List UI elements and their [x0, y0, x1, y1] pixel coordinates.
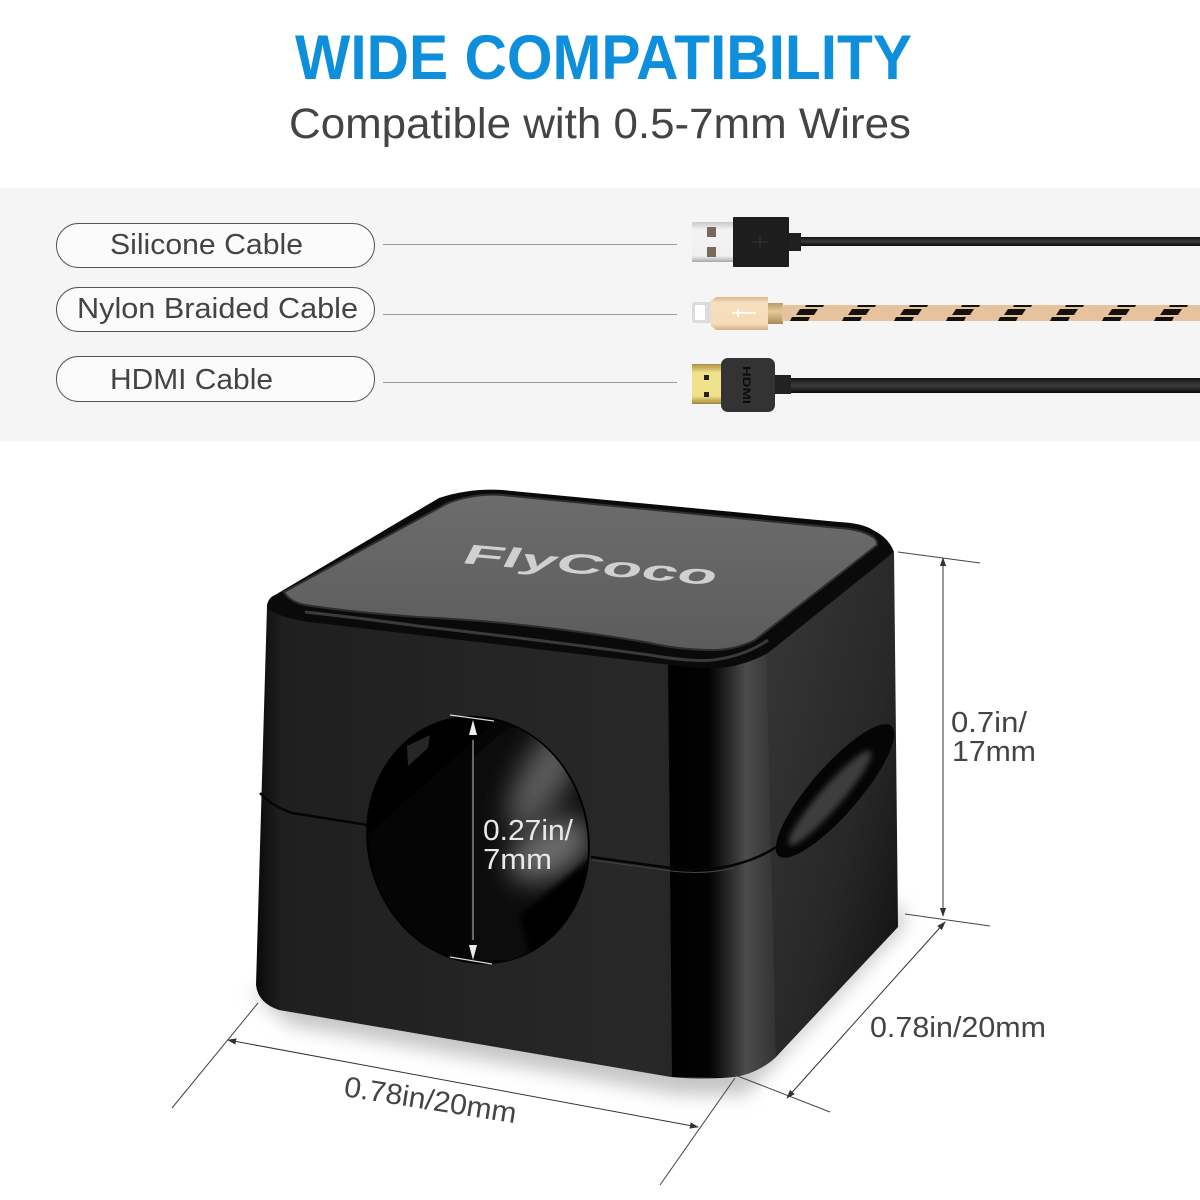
- subtitle: Compatible with 0.5-7mm Wires: [289, 100, 911, 148]
- logo: FlyCoco: [457, 540, 725, 592]
- icon: lightning braided cable: [692, 297, 1200, 330]
- seam line: [260, 793, 776, 869]
- dimension: height: 0.7in/: [951, 707, 1028, 739]
- shadow: [250, 900, 905, 1095]
- round cable hole: [366, 716, 590, 964]
- front face: [256, 606, 776, 1078]
- hole dimension text: 0.27in/: [483, 815, 574, 847]
- dimension: width: [172, 1003, 735, 1185]
- icon: hdmi cable: [692, 358, 1200, 412]
- label: nylon braided cable: [56, 288, 374, 332]
- dimension: depth: [735, 922, 1046, 1112]
- label: hdmi cable: [56, 356, 374, 402]
- right face: [766, 552, 898, 1057]
- label: silicone cable: [56, 224, 374, 268]
- panel: cable types: [0, 188, 1200, 441]
- product: cable clip block: [250, 490, 910, 1095]
- label: hdmi cable: HDMI Cable: [110, 364, 273, 396]
- hole dimension text: 7mm: [483, 844, 552, 876]
- lid rim: [267, 490, 894, 668]
- corner highlight: [668, 652, 776, 1077]
- label: silicone cable: Silicone Cable: [110, 229, 303, 261]
- dimension: width: 0.78in/20mm: [342, 1071, 519, 1130]
- icon: usb cable: [692, 217, 1200, 267]
- icon: hdmi cable: HDMI: [740, 366, 752, 404]
- lid top face: [284, 495, 877, 650]
- dimension: height: 17mm: [952, 736, 1036, 768]
- dimension: height: [898, 552, 1036, 926]
- label: nylon braided cable: Nylon Braided Cable: [77, 293, 358, 325]
- dimension: depth: 0.78in/20mm: [870, 1012, 1046, 1044]
- title: WIDE COMPATIBILITY: [295, 23, 912, 93]
- hole diameter arrow: [450, 715, 494, 964]
- side notch: [760, 710, 910, 872]
